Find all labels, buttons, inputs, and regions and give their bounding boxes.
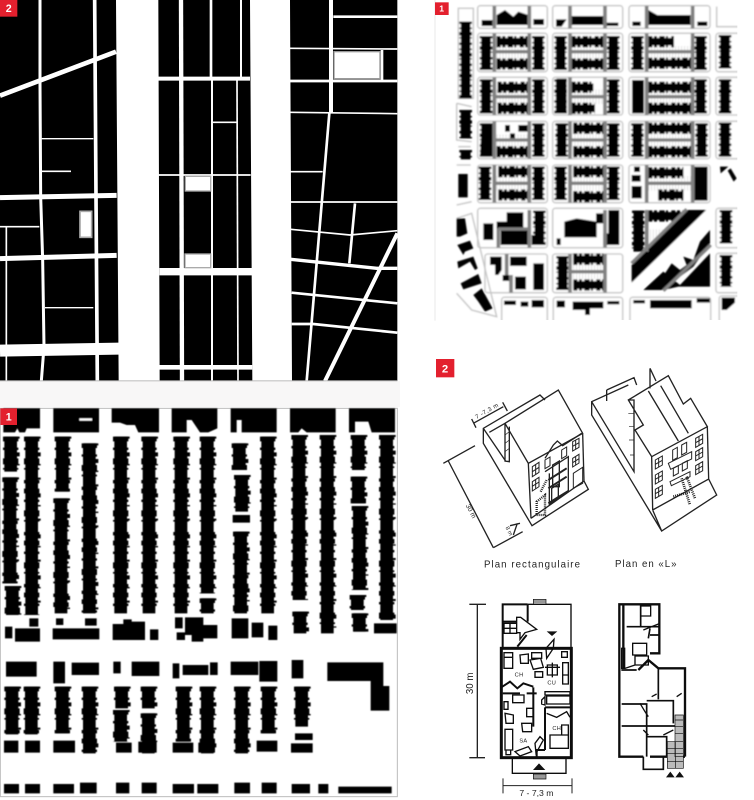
caption: L plan: Plan en «L» (615, 559, 678, 570)
room label CH: CH (515, 673, 524, 679)
panel: block map with lanes (435, 0, 746, 324)
jagged footprint strips (10, 435, 388, 753)
room label CH: CH (552, 726, 561, 732)
ground floor plan (501, 599, 571, 779)
central courtyards (185, 176, 211, 268)
upper floor plan (619, 604, 685, 769)
caption: rectangular plan: Plan rectangulaire (484, 560, 581, 571)
L plan house (592, 368, 717, 531)
badge 1 (435, 2, 449, 15)
width dimension: 7 -7,3 m (475, 403, 500, 421)
white diagonal road (635, 213, 711, 287)
depth dimension: 30 m (464, 503, 477, 520)
panel: black-and-white street plan (0, 0, 397, 381)
small block clusters (4, 515, 397, 793)
yard ticks (497, 53, 692, 272)
west courtyard (80, 211, 92, 237)
badge 2 (436, 359, 454, 377)
east courtyard (334, 52, 380, 79)
ground floor triangles (533, 631, 557, 770)
jagged building rows (466, 22, 726, 290)
label: 7 - 7,3 m: 7 - 7,3 m (519, 788, 553, 798)
panel: floor plans (465, 599, 685, 798)
badge 1: 1 (6, 411, 12, 423)
panel: axonometric house drawings (436, 359, 717, 571)
rectangular plan house (443, 390, 588, 548)
central district streets (158, 0, 252, 381)
solid buildings (457, 10, 737, 315)
east district streets (290, 0, 397, 381)
block outlines (457, 6, 746, 324)
room label SA: SA (519, 738, 528, 744)
badge 2 (0, 0, 17, 17)
setback dimension: 8 m (504, 526, 513, 537)
badge 1 (0, 408, 17, 425)
west district streets (0, 0, 119, 381)
upper floor triangles (666, 772, 684, 777)
panel: black footprint map (0, 408, 397, 797)
grey lane bars (494, 6, 711, 293)
room label CU: CU (547, 681, 556, 687)
label: 30 m: 30 m (465, 673, 476, 694)
avenues (116, 0, 292, 381)
badge 2: 2 (442, 363, 448, 375)
badge 2: 2 (6, 3, 12, 15)
top row blocks (3, 408, 395, 432)
badge 1: 1 (439, 3, 444, 13)
height dimension (469, 604, 486, 758)
width dimension (503, 778, 572, 793)
